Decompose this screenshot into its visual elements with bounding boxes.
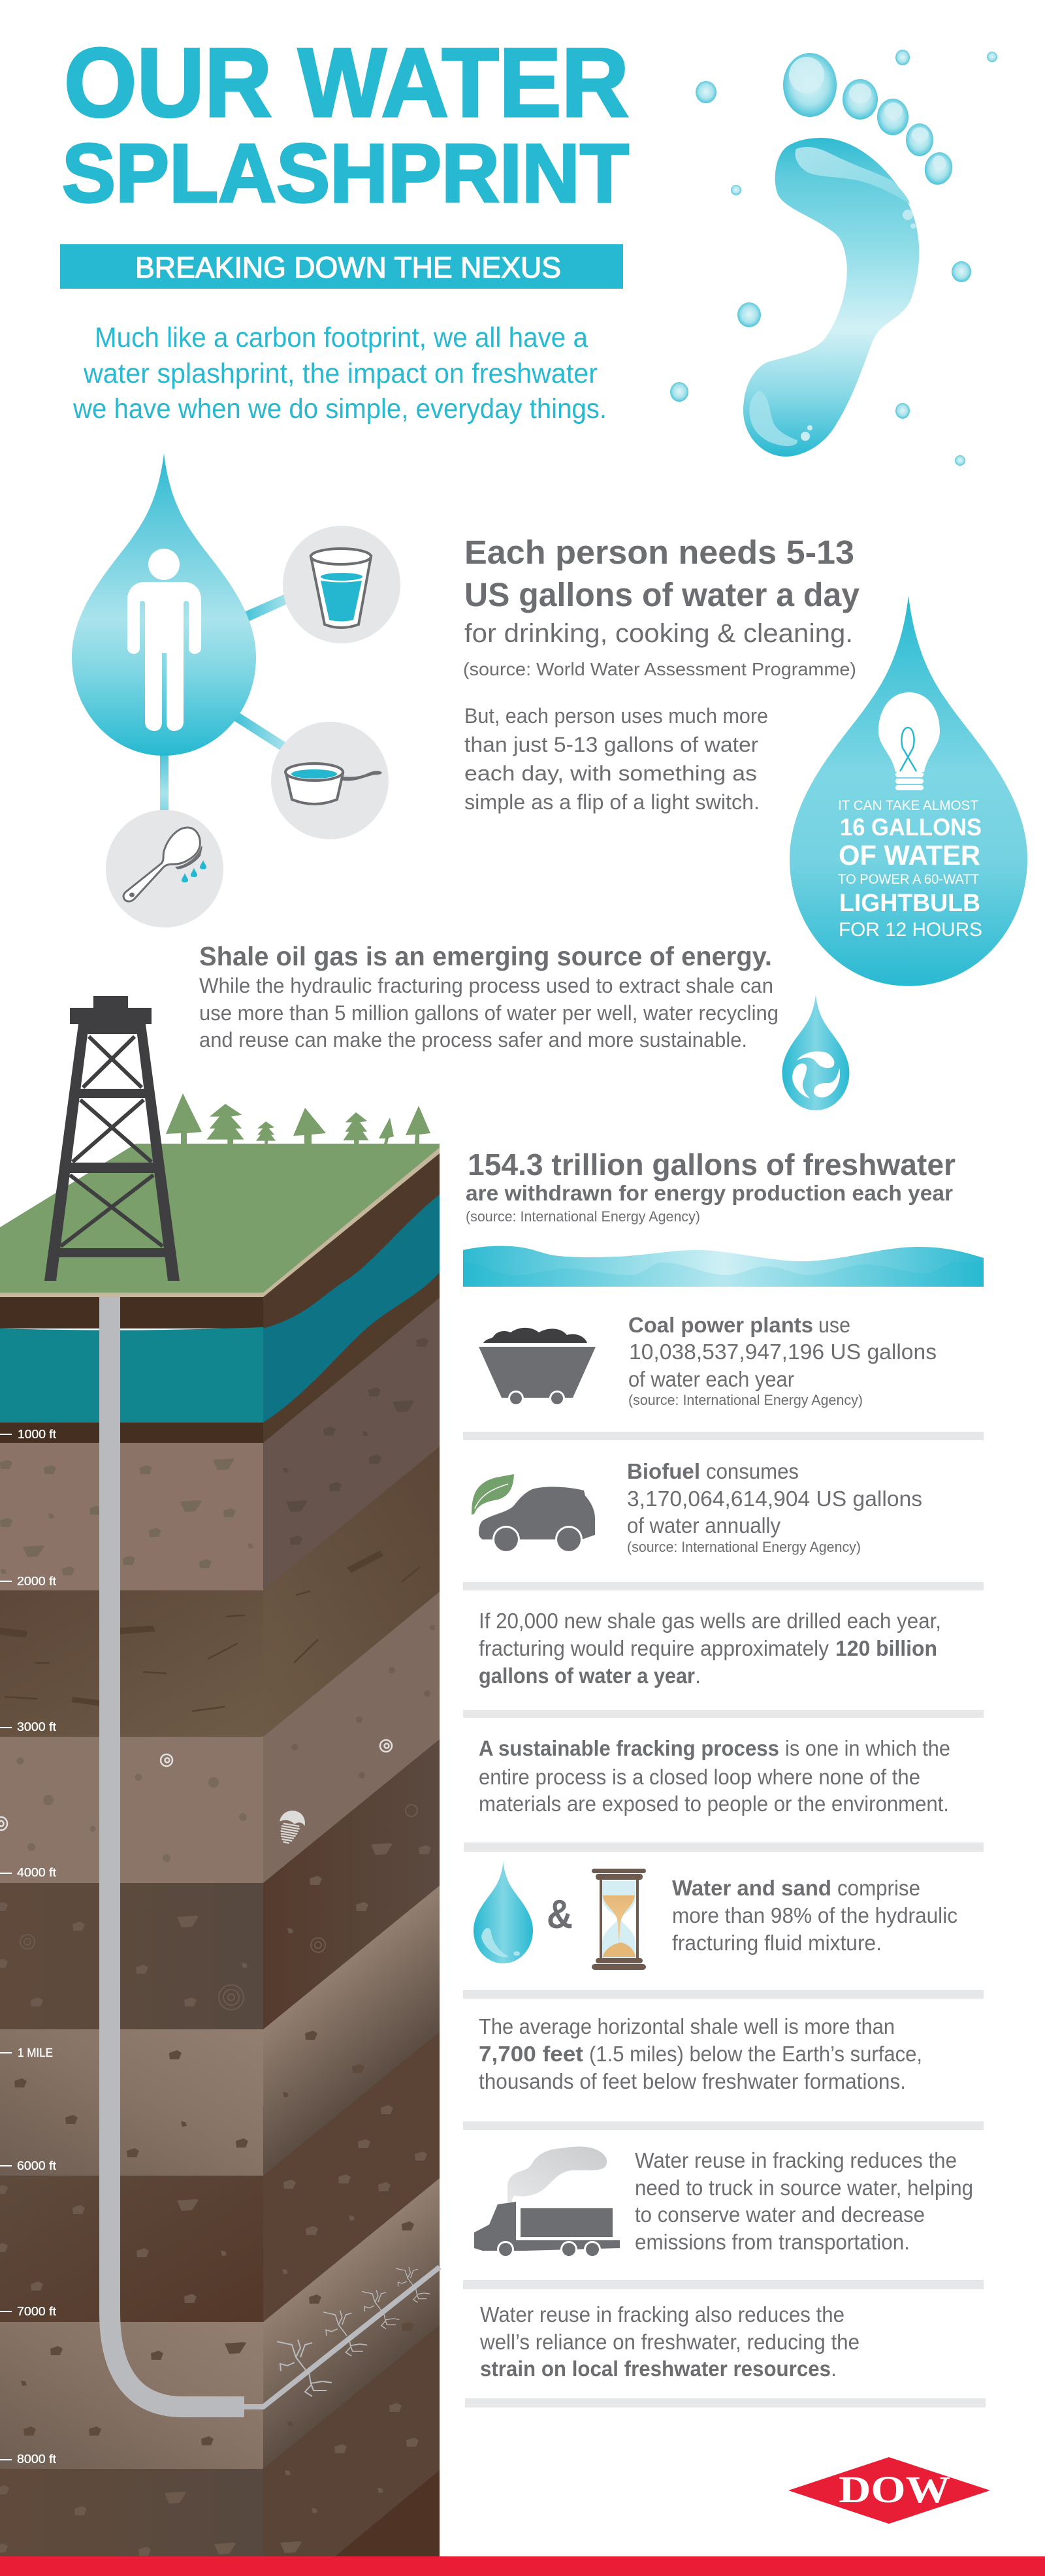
divider [463,2121,984,2130]
divider [463,1432,984,1440]
text block: biofuel: (source: International Energy Agency) [627,1539,861,1555]
intro text: Much like a carbon footprint, we all have a [95,322,588,353]
text block: well depth: The average horizontal shale well is more than [479,2014,895,2038]
text block: daily water needs: (source: World Water Assessment Programme) [463,659,856,679]
icon: lightbulb [878,692,940,790]
icon: toes [783,53,956,187]
text block: shale wells: fracturing would require approximately [479,1636,829,1660]
connector lines [160,594,288,813]
lightbulb callout text: TO POWER A 60-WATT [838,872,979,887]
divider [463,1582,984,1590]
lightbulb callout text: 16 GALLONS [840,814,982,841]
text block: trucking reduction: to conserve water and decrease [635,2202,925,2227]
heading: freshwater withdrawn: (source: International Energy Agency) [466,1208,700,1225]
text block: well depth: thousands of feet below freshwater formations. [479,2069,906,2093]
divider [464,1843,984,1852]
depth scale: 6000 ft [17,2159,56,2172]
text block: daily water needs: US gallons of water a day [464,576,860,613]
fossils: ammonites [20,1805,417,2010]
icon: water drop [474,1862,533,1963]
text block: actual water use: than just 5-13 gallons of water [464,733,758,756]
text block: shale oil gas: Shale oil gas is an emerging source of energy. [199,941,772,971]
icon: coal cart [479,1328,596,1406]
text block: shale wells: If 20,000 new shale gas wells are drilled each year, [479,1609,941,1633]
side backing [263,1148,440,2556]
depth scale: 3000 ft [17,1720,56,1733]
text block: actual water use: But, each person uses much more [464,704,768,728]
callout: lightbulb drop [790,596,1027,986]
icon: scattered water droplets [670,50,997,466]
text block: daily water needs [463,534,860,679]
intro text: we have when we do simple, everyday things. [72,393,607,425]
lightbulb callout text: OF WATER [839,840,980,871]
text block: actual water use: each day, with something as [464,762,757,785]
text block: coal [628,1313,937,1408]
intro text [72,322,607,425]
icon: oil derrick [44,996,180,1281]
text block: reliance on freshwater: strain on local freshwater resources [480,2357,831,2381]
text block: shale oil gas: use more than 5 million gallons of water per well, water recycling [199,1001,779,1025]
intro text: water splashprint, the impact on freshwater [83,358,598,389]
ampersand: & [547,1892,573,1937]
divider [465,2398,986,2407]
text block: biofuel: Biofuel [627,1459,700,1483]
rocks: upper light layer [0,1458,253,1575]
text block: shale oil gas [199,941,779,1052]
heading: freshwater withdrawn: 154.3 trillion gallons of freshwater [468,1148,956,1182]
logo: Dow: R [942,2513,947,2520]
icon: glass of water [283,526,400,643]
icon: recycling water drop [782,995,849,1110]
ground surface [0,1144,440,1297]
rocks: lower light layers [14,2031,414,2445]
icon: trees [166,1093,430,1145]
text block: sustainable fracking: materials are exposed to people or the environment. [479,1792,949,1816]
text block: biofuel: 3,170,064,614,904 US gallons [627,1487,922,1511]
text block: coal: Coal power plants [628,1313,813,1337]
icon: dripping spoon [106,810,223,927]
fossil: trilobite [276,1809,307,1845]
title: SPLASHPRINT [62,127,629,219]
text block: coal: 10,038,537,947,196 US gallons [629,1340,937,1364]
depth scale: 8000 ft [17,2453,56,2466]
title: OUR WATER [64,27,629,137]
logo: Dow [788,2457,990,2524]
text block: trucking reduction: Water reuse in fracking reduces the [635,2148,957,2172]
fracture branches [277,2267,430,2396]
text block: actual water use [464,704,768,814]
text block: trucking reduction: need to truck in source water, helping [635,2176,973,2200]
text block: sustainable fracking: entire process is a closed loop where none of the [479,1765,920,1789]
icon: pot of water [271,722,389,839]
text block: water and sand: more than 98% of the hydraulic [672,1903,957,1927]
text block: biofuel: consumes [706,1459,799,1483]
logo: Dow: DOW [839,2468,950,2511]
heading: freshwater withdrawn: are withdrawn for energy production each year [466,1181,953,1205]
side rock layers [263,1153,440,2556]
subtitle banner: BREAKING DOWN THE NEXUS [135,251,561,284]
text block: biofuel: of water annually [627,1513,780,1538]
divider [463,2280,984,2289]
text block: daily water needs: Each person needs 5-13 [464,534,854,571]
pebbles: fossil layer [17,1625,435,1862]
streaks: sediment layer [0,1551,420,1711]
icon: water footprint [743,53,956,457]
front rock layers [0,1297,263,2556]
text block: well depth: 7,700 feet [479,2042,583,2066]
divider [463,1710,984,1718]
geological cross-section [0,1144,440,2556]
text block: reliance on freshwater [479,2302,860,2381]
icon: person in water drop [72,453,256,756]
subtitle banner [60,244,623,289]
text block: sustainable fracking: is one in which the [785,1736,950,1760]
text block: shale oil gas: While the hydraulic fracturing process used to extract shale can [199,974,773,997]
text block: shale wells: gallons of water a year [479,1664,695,1688]
footer bar [0,2556,1045,2576]
depth scale: 2000 ft [17,1575,56,1588]
lightbulb callout text: FOR 12 HOURS [839,919,982,941]
text block: actual water use: simple as a flip of a light switch. [464,790,760,814]
lightbulb callout text: LIGHTBULB [839,890,980,917]
depth scale: 1 MILE [18,2046,53,2059]
depth scale: 4000 ft [17,1866,56,1879]
fossil spirals [0,1740,392,1830]
text block: biofuel [627,1459,922,1555]
text block: shale wells: 120 billion [835,1636,937,1660]
depth scale [0,1428,56,2466]
lightbulb callout text: IT CAN TAKE ALMOST [838,798,978,813]
text block: coal: (source: International Energy Agency) [628,1392,863,1408]
water wave band [463,1246,984,1287]
text block: sustainable fracking [479,1736,950,1816]
text block: sustainable fracking: A sustainable fracking process [479,1736,779,1760]
well pipe [110,1297,440,2417]
text block: water and sand: comprise [837,1876,920,1900]
text block: trucking reduction: emissions from transportation. [635,2230,910,2254]
title [62,27,629,219]
text block: shale wells: . [695,1664,701,1688]
text block: water and sand: fracturing fluid mixture. [672,1931,882,1955]
text block: shale wells [479,1609,941,1688]
rocks: dark fossil layer [0,1843,431,2006]
heading: freshwater withdrawn [466,1148,956,1225]
text block: water and sand [672,1876,957,1955]
text block: coal: use [818,1313,850,1337]
icon: truck with smoke [474,2147,620,2258]
text block: reliance on freshwater: well’s reliance on freshwater, reducing the [479,2330,860,2354]
text block: trucking reduction [635,2148,973,2254]
text block: shale oil gas: and reuse can make the process safer and more sustainable. [199,1028,747,1052]
text block: daily water needs: for drinking, cooking & cleaning. [464,619,853,648]
text block: well depth: (1.5 miles) below the Earth’s surface, [589,2042,922,2066]
text block: reliance on freshwater: . [831,2357,837,2381]
rocks: lower dark layers [0,2105,427,2556]
divider [463,1990,984,1999]
text block: coal: of water each year [628,1367,794,1391]
text block: water and sand: Water and sand [672,1876,831,1900]
icon: hourglass [592,1869,646,1970]
depth scale: 7000 ft [17,2305,56,2318]
text block: reliance on freshwater: Water reuse in fracking also reduces the [480,2302,844,2326]
icon: biofuel car and leaf [472,1474,595,1553]
text block: well depth [479,2014,922,2093]
depth scale: 1000 ft [18,1428,56,1441]
lightbulb callout text [838,798,982,941]
